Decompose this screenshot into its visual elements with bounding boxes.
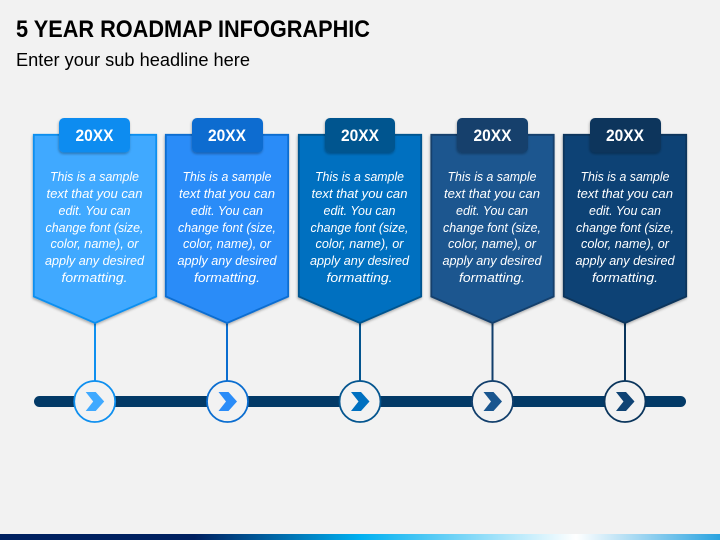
connector 1 [94, 322, 96, 381]
panel 2 [166, 135, 288, 323]
year tab 2: 20XX [208, 126, 247, 145]
body text 2: text that you can [179, 186, 275, 201]
body text 1: apply any desired [45, 253, 145, 268]
body text 3: change font (size, [310, 220, 408, 235]
year tab 2 [192, 118, 263, 152]
body text 3: apply any desired [310, 253, 410, 268]
body text 1: change font (size, [46, 220, 144, 235]
body text 1: edit. You can [58, 203, 130, 218]
step 3 [299, 118, 421, 422]
body text 5: text that you can [577, 186, 673, 201]
body text 5: This is a sample [580, 169, 670, 184]
body text 2: formatting. [194, 270, 260, 285]
body text 4: formatting. [459, 270, 525, 285]
body text 4: apply any desired [442, 253, 542, 268]
body text 5: formatting. [592, 270, 658, 285]
year tab 5 [590, 118, 661, 152]
marker 1 [74, 381, 115, 422]
body text 3: text that you can [312, 186, 408, 201]
body text 1 [45, 169, 145, 285]
connector 3 [359, 322, 361, 381]
body text 2 [178, 169, 277, 285]
panel 1 [34, 135, 156, 323]
body text 1: color, name), or [50, 236, 139, 251]
body text 4: change font (size, [443, 220, 541, 235]
panel 4 [431, 135, 554, 323]
body text 5 [576, 169, 675, 285]
body text 1: formatting. [62, 270, 128, 285]
year tab 5: 20XX [606, 126, 645, 145]
timeline bar [34, 396, 686, 407]
year tab 3 [325, 118, 395, 152]
year tab 1: 20XX [76, 126, 114, 145]
body text 5: change font (size, [576, 220, 674, 235]
body text 2: color, name), or [183, 236, 272, 251]
body text 1: This is a sample [50, 169, 139, 184]
body text 4: This is a sample [448, 169, 536, 184]
subtitle: Enter your sub headline here [16, 50, 250, 70]
body text 2: apply any desired [178, 253, 277, 268]
marker 5 [604, 381, 646, 422]
marker 4 [472, 381, 513, 422]
step 5 [564, 118, 686, 422]
year tab 4 [457, 118, 528, 152]
body text 4: text that you can [444, 186, 540, 201]
year tab 1 [59, 118, 130, 152]
connector 2 [226, 322, 228, 381]
step 4 [431, 118, 554, 422]
step 1 [34, 118, 156, 422]
title: 5 YEAR ROADMAP INFOGRAPHIC [16, 16, 370, 43]
body text 2: edit. You can [191, 203, 263, 218]
year tab 4: 20XX [474, 126, 512, 145]
body text 4 [442, 169, 542, 285]
body text 3: formatting. [326, 270, 392, 285]
body text 4: edit. You can [456, 203, 528, 218]
connector 4 [492, 322, 494, 381]
panel 5 [564, 135, 686, 323]
bottom gradient bar [0, 534, 720, 540]
marker 2 [207, 381, 248, 422]
step 2 [166, 118, 288, 422]
body text 3: This is a sample [315, 169, 404, 184]
body text 5: edit. You can [589, 203, 661, 218]
body text 2: This is a sample [182, 169, 272, 184]
body text 5: color, name), or [581, 236, 670, 251]
year tab 3: 20XX [341, 126, 380, 145]
body text 2: change font (size, [178, 220, 276, 235]
body text 3: color, name), or [316, 236, 404, 251]
panel 3 [299, 135, 421, 323]
connector 5 [624, 322, 626, 381]
body text 5: apply any desired [576, 253, 675, 268]
body text 3: edit. You can [324, 203, 396, 218]
body text 1: text that you can [46, 186, 142, 201]
marker 3 [340, 381, 380, 422]
body text 3 [310, 169, 410, 285]
body text 4: color, name), or [448, 236, 537, 251]
